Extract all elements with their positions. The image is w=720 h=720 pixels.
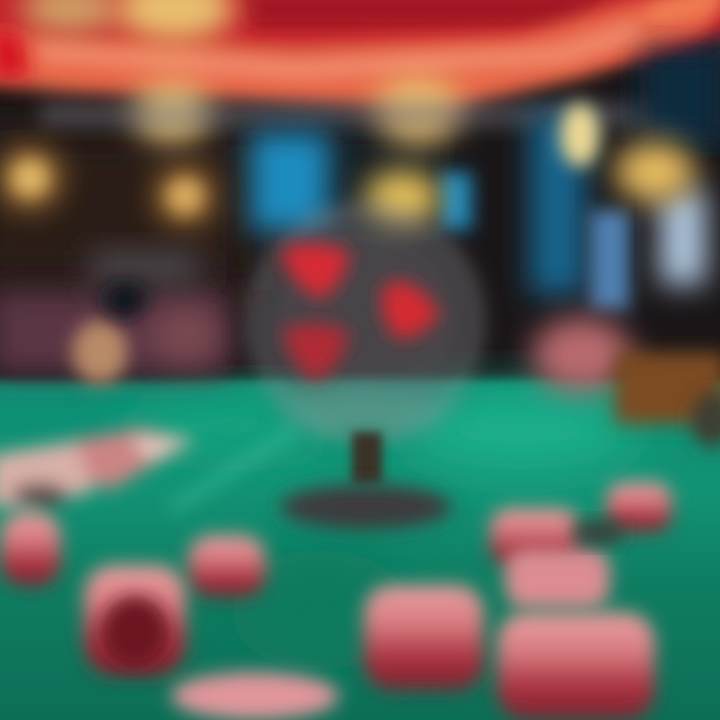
playing cards xyxy=(0,428,195,510)
background: dark room xyxy=(0,55,720,386)
ceiling banner xyxy=(0,0,720,150)
grey band xyxy=(40,102,680,128)
heart: bottom left xyxy=(282,323,350,382)
glass sphere with hearts xyxy=(253,210,477,434)
back wall lower band xyxy=(0,250,230,384)
felt table xyxy=(0,380,720,720)
blue panels xyxy=(250,50,720,310)
top lights xyxy=(20,0,462,144)
heart: right xyxy=(382,281,440,338)
poker chips xyxy=(0,482,672,720)
heart: top left xyxy=(280,243,350,300)
right side chips and table xyxy=(532,317,720,448)
sphere stand xyxy=(280,432,452,529)
wall lamps xyxy=(0,103,695,226)
